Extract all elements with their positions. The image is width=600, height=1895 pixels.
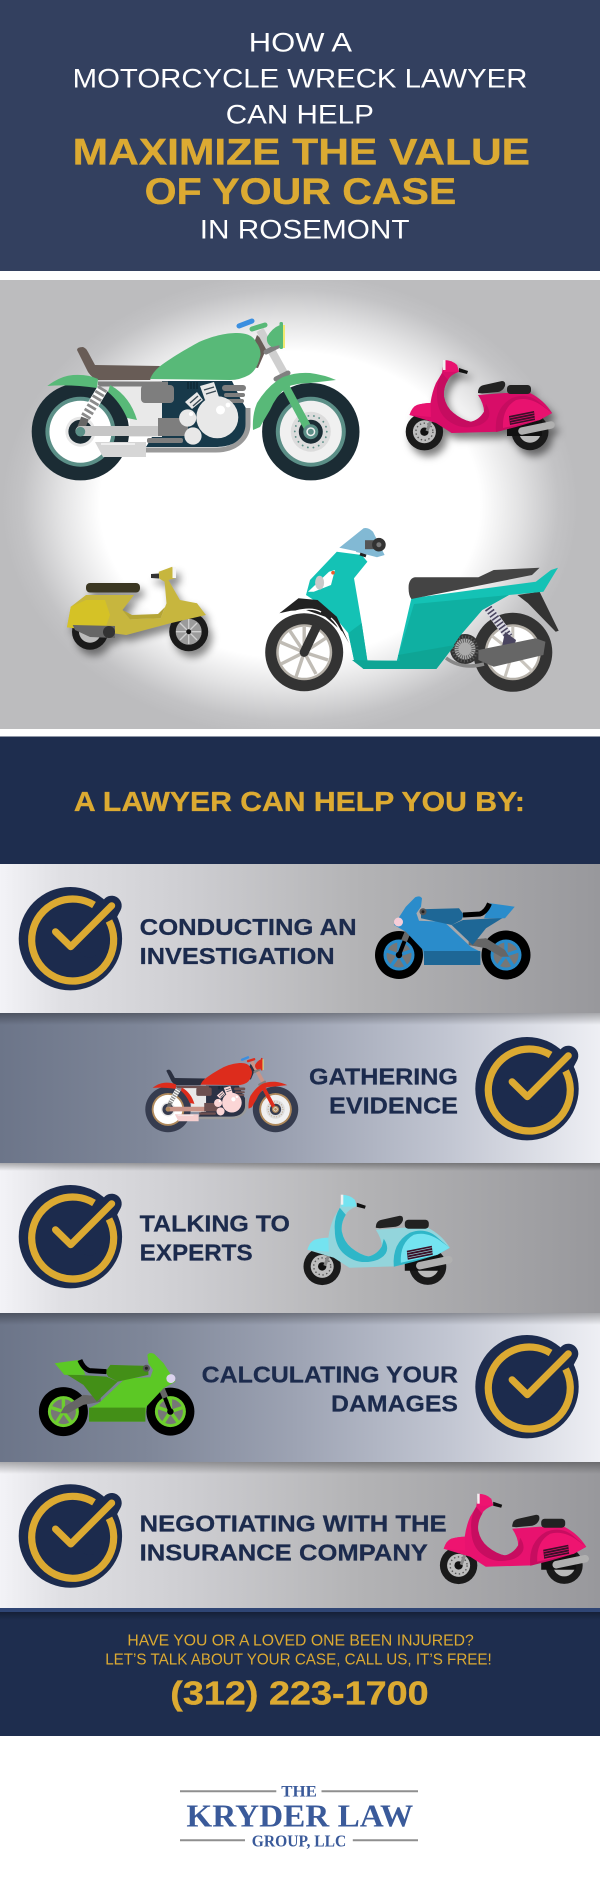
text: conducting an investigation: INVESTIGATION	[140, 943, 335, 969]
icon: light blue scooter	[304, 1195, 450, 1285]
icon: check badge	[475, 1037, 579, 1140]
icon: yellow scooter	[67, 567, 208, 651]
panel: gathering evidence	[0, 1013, 600, 1163]
title	[73, 28, 530, 245]
logo: The Kryder Law Group, LLC: THE	[281, 1784, 317, 1801]
panel: negotiating with the insurance company	[0, 1462, 600, 1608]
text: calculating your damages	[202, 1361, 458, 1416]
icon: large teal scooter	[265, 528, 559, 692]
text: conducting an investigation: CONDUCTING AN	[140, 914, 357, 940]
title: OF YOUR CASE	[145, 171, 456, 212]
text: negotiating with the insurance company: INSURANCE COMPANY	[140, 1540, 428, 1566]
heading band	[0, 736, 600, 864]
icon: blue sport bike	[375, 896, 530, 980]
call to action text	[105, 1632, 492, 1668]
icon: magenta scooter	[440, 1494, 586, 1584]
icon: check badge	[19, 1484, 122, 1588]
text: talking to experts	[140, 1211, 290, 1266]
panel: talking to experts	[0, 1163, 600, 1313]
call to action text: HAVE YOU OR A LOVED ONE BEEN INJURED?	[127, 1632, 474, 1649]
icon: green sport bike	[39, 1353, 194, 1436]
text: gathering evidence	[309, 1063, 458, 1118]
panel: conducting an investigation	[0, 864, 600, 1013]
panel: calculating your damages	[0, 1313, 600, 1462]
title: MAXIMIZE THE VALUE	[73, 131, 530, 172]
text: conducting an investigation	[140, 914, 357, 969]
title: HOW A	[249, 28, 352, 58]
logo: The Kryder Law Group, LLC: GROUP, LLC	[252, 1832, 346, 1851]
icon: check badge	[475, 1335, 579, 1438]
title: MOTORCYCLE WRECK LAWYER	[73, 64, 527, 94]
phone number: (312) 223-1700	[170, 1674, 429, 1711]
text: gathering evidence: GATHERING	[309, 1063, 458, 1089]
text: negotiating with the insurance company	[140, 1511, 447, 1566]
header banner	[0, 0, 600, 271]
panel: motorcycles illustration	[0, 280, 600, 729]
icon: green cruiser motorcycle	[32, 321, 359, 480]
text: calculating your damages: DAMAGES	[331, 1390, 458, 1416]
heading: A LAWYER CAN HELP YOU BY:	[74, 786, 525, 817]
title: IN ROSEMONT	[200, 215, 410, 245]
text: talking to experts: EXPERTS	[140, 1240, 253, 1266]
text: talking to experts: TALKING TO	[140, 1211, 290, 1237]
text: negotiating with the insurance company: NEGOTIATING WITH THE	[140, 1511, 447, 1537]
icon: check badge	[19, 887, 122, 990]
call to action text: LET’S TALK ABOUT YOUR CASE, CALL US, IT’S FREE!	[105, 1651, 492, 1668]
text: calculating your damages: CALCULATING YOUR	[202, 1361, 458, 1387]
icon: check badge	[19, 1185, 122, 1288]
logo: The Kryder Law Group, LLC	[180, 1784, 418, 1851]
title: CAN HELP	[226, 100, 374, 130]
icon: red cruiser motorcycle	[145, 1057, 298, 1132]
call to action band	[0, 1608, 600, 1736]
logo: The Kryder Law Group, LLC: KRYDER LAW	[186, 1798, 413, 1834]
text: gathering evidence: EVIDENCE	[329, 1092, 458, 1118]
icon: pink scooter	[406, 360, 552, 450]
